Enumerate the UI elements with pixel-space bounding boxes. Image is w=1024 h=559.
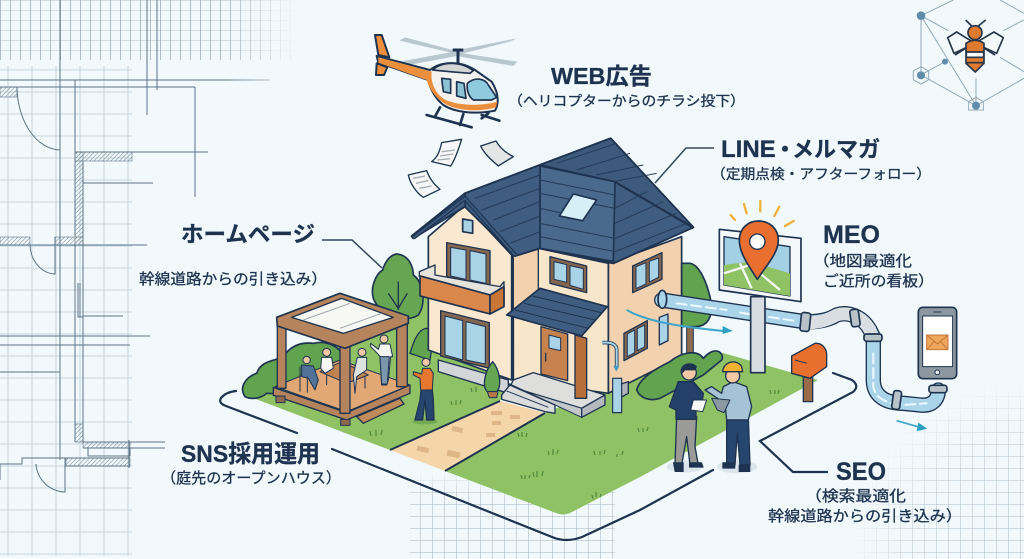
lower gable window [441,311,489,368]
balcony [419,265,504,314]
deck floor [275,360,410,412]
leader line: LINE [655,148,714,183]
right lawn [445,353,818,514]
right upper window [633,253,662,293]
person holding tablet [412,358,438,424]
person standing [371,335,393,385]
pergola [273,293,438,425]
flyer three [408,171,440,197]
tree behind pergola [372,254,423,319]
garden path [390,401,545,471]
porch column [575,335,587,398]
shrub along right wall [637,351,722,400]
orange stripe [378,57,497,110]
pipe flanges [658,290,947,410]
gable attic vent [463,219,473,233]
upper gable window [447,243,490,287]
tail [375,35,389,75]
potted plant [484,362,500,398]
grass tufts [370,387,779,499]
label: MEO block: （地図最適化 [813,250,912,271]
shrub near house [410,328,433,360]
label: LINE heading: LINE [721,136,776,163]
label: homepage heading: ホームページ [181,222,315,247]
location pin [731,201,794,279]
blueprint floor plan background [0,0,300,556]
label: SEO block: 幹線道路からの引き込み） [768,505,962,526]
entrance door [541,327,568,381]
label: SNS heading: SNS採用運用 [181,441,320,468]
data pipe [662,300,938,405]
leader line: homepage [322,240,382,268]
road outline [220,373,856,540]
arrow head upper [723,326,733,334]
flyer one [432,139,462,166]
label: SEO block: （検索最適化 [805,485,906,506]
flyer two [481,141,513,166]
left lawn [253,290,520,450]
person seated back [321,348,333,373]
porch roof [507,288,607,336]
gable wall [428,205,512,380]
house [412,138,693,417]
main roof [412,138,693,263]
label: WEB ad detail: （ヘリコプターからのチラシ投下） [508,91,745,111]
back post [397,323,407,387]
consultant [667,364,707,473]
rotor blades [399,37,517,66]
label: SEO block: SEO [836,458,886,486]
bee and network logo [913,0,1024,110]
label: LINE detail: （定期点検・アフターフォロー） [711,164,931,184]
label: MEO block [813,221,934,291]
engine hood [433,63,473,73]
tree right of house [682,263,711,353]
center wall [513,248,608,393]
label: MEO block: MEO [823,221,880,249]
label: homepage detail: 幹線道路からの引き込み） [139,268,327,289]
label: LINE heading: メルマガ [792,137,880,162]
rotor mast [453,50,463,63]
shrubs and trees around house [243,254,433,398]
deck front beam [273,385,410,425]
right lower window [624,321,647,361]
downpipe [602,343,622,413]
billboard post [751,297,765,373]
label: SEO block [768,458,962,526]
ground and garden [253,290,818,514]
water flow arrow lower [897,421,927,431]
label: LINE heading: ・ [774,137,796,162]
map billboard, pipe and phone [627,201,957,473]
right wall [608,237,682,393]
decorative grid bottom right [850,380,1024,559]
billboard [719,229,801,302]
person seated right [353,348,367,393]
label: SNS detail: （庭先のオープンハウス） [161,467,341,488]
narrow window [659,314,668,345]
meeting table and group [300,335,393,395]
person seated left [300,356,318,393]
helicopter skids [427,107,499,127]
helicopter and flyers [375,35,517,197]
label: WEB ad heading: WEB広告 [551,63,652,89]
decorative grid bottom center [410,470,615,559]
fuselage [377,56,498,113]
center upper window [550,257,587,293]
engineer [705,362,757,473]
pergola roof [277,293,408,348]
skylight [559,194,597,221]
cabin windows [442,78,497,100]
water flow arrow upper [627,310,723,331]
front posts [277,318,350,413]
shrub left of pergola [243,342,343,398]
label: MEO block: ご近所の看板） [823,270,934,291]
entry porch and steps [502,373,605,417]
foundation [438,360,628,402]
smartphone [918,307,957,379]
mailbox [792,343,827,402]
